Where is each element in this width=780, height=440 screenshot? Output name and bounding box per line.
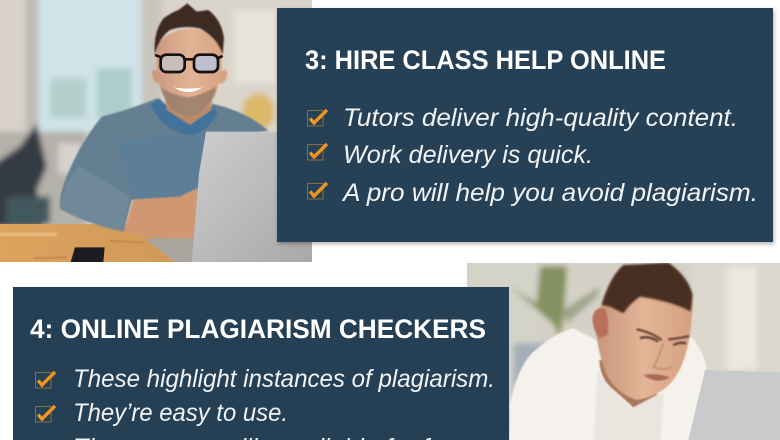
neck and head [152,28,227,125]
face details [637,329,689,381]
photo: smiling man with laptop [0,0,323,263]
text: checker benefit 2: They’re easy to use. [73,399,288,427]
icon: checkbox 1 [36,372,55,388]
laptop [145,238,194,262]
hair [155,3,224,55]
mouth [174,87,203,92]
text: benefit 2: Work delivery is quick. [343,141,593,169]
sweater [60,98,268,232]
text: checker benefit 1: These highlight instances of plagiarism. [73,365,495,393]
panel: step 4 [13,287,509,440]
hair [602,263,693,313]
heading: step 4: 4: ONLINE PLAGIARISM CHECKERS [30,314,486,344]
panel: step 3 [277,8,773,242]
icon: checkbox 1 [308,110,327,126]
icon: checkbox 2 [308,144,327,160]
text: benefit 1: Tutors deliver high-quality content. [343,104,738,132]
photo: young man at laptop [460,260,780,440]
icon: checkbox 3 [308,183,327,199]
text: benefit 3: A pro will help you avoid plagiarism. [341,179,758,207]
neck [599,360,657,407]
heading: step 3: 3: HIRE CLASS HELP ONLINE [305,45,666,75]
icon: checkbox 2 [36,406,55,422]
hand [124,188,200,239]
laptop [688,370,780,440]
head [595,267,693,400]
shirt [509,328,707,440]
glasses [155,55,223,72]
table [0,224,194,262]
phone [71,247,105,262]
